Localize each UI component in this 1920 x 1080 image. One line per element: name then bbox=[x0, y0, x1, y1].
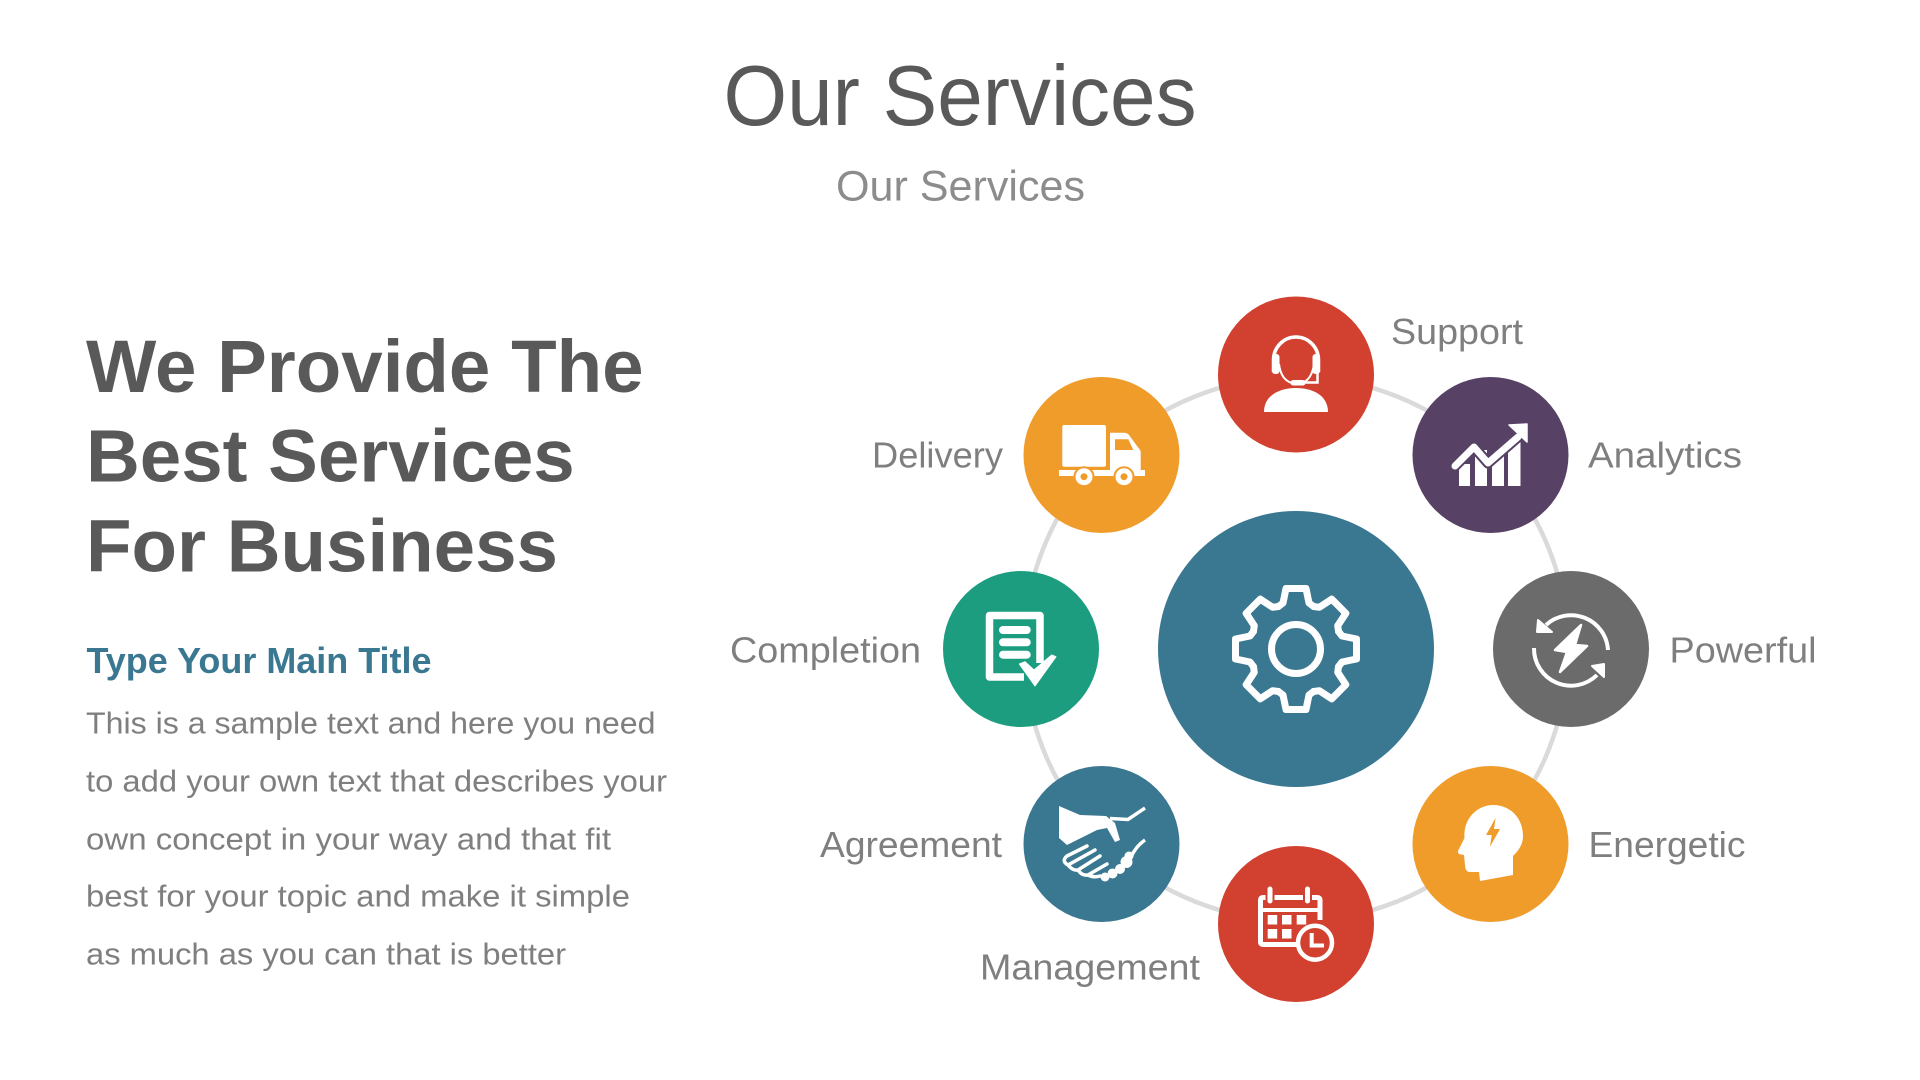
heading: For Business bbox=[86, 504, 558, 588]
title: Our Services bbox=[724, 49, 1196, 144]
icon: energetic head bbox=[1412, 766, 1568, 922]
center hub with gear icon bbox=[1158, 511, 1434, 787]
icon: completion document bbox=[943, 571, 1099, 727]
label: Support: Support bbox=[1391, 311, 1523, 352]
icon: delivery truck bbox=[1024, 377, 1180, 533]
icon: powerful cycle bolt bbox=[1493, 571, 1649, 727]
label: Completion: Completion bbox=[730, 630, 921, 670]
services diagram bbox=[730, 296, 1816, 1002]
label: Agreement: Agreement bbox=[820, 824, 1002, 865]
label: Powerful: Powerful bbox=[1670, 630, 1816, 670]
label: Delivery: Delivery bbox=[872, 434, 1003, 476]
body text: to add your own text that describes your bbox=[86, 764, 667, 798]
label: Energetic: Energetic bbox=[1588, 824, 1746, 865]
sub heading: Type Your Main Title bbox=[86, 640, 432, 681]
icon: analytics chart bbox=[1412, 377, 1568, 533]
icon: support headset bbox=[1218, 296, 1374, 452]
body text: This is a sample text and here you need bbox=[86, 706, 656, 740]
heading: We Provide The bbox=[86, 325, 644, 408]
body text: own concept in your way and that fit bbox=[86, 822, 611, 856]
label: Management: Management bbox=[980, 946, 1200, 988]
body text bbox=[86, 706, 667, 972]
connecting ring bbox=[1024, 377, 1568, 921]
label: Analytics: Analytics bbox=[1588, 434, 1742, 476]
icon: management calendar bbox=[1218, 846, 1374, 1002]
heading bbox=[86, 325, 644, 588]
heading: Best Services bbox=[86, 414, 575, 498]
body text: best for your topic and make it simple bbox=[86, 878, 630, 914]
body text: as much as you can that is better bbox=[86, 936, 566, 972]
icon: agreement handshake bbox=[1024, 766, 1180, 922]
subtitle: Our Services bbox=[836, 162, 1085, 210]
